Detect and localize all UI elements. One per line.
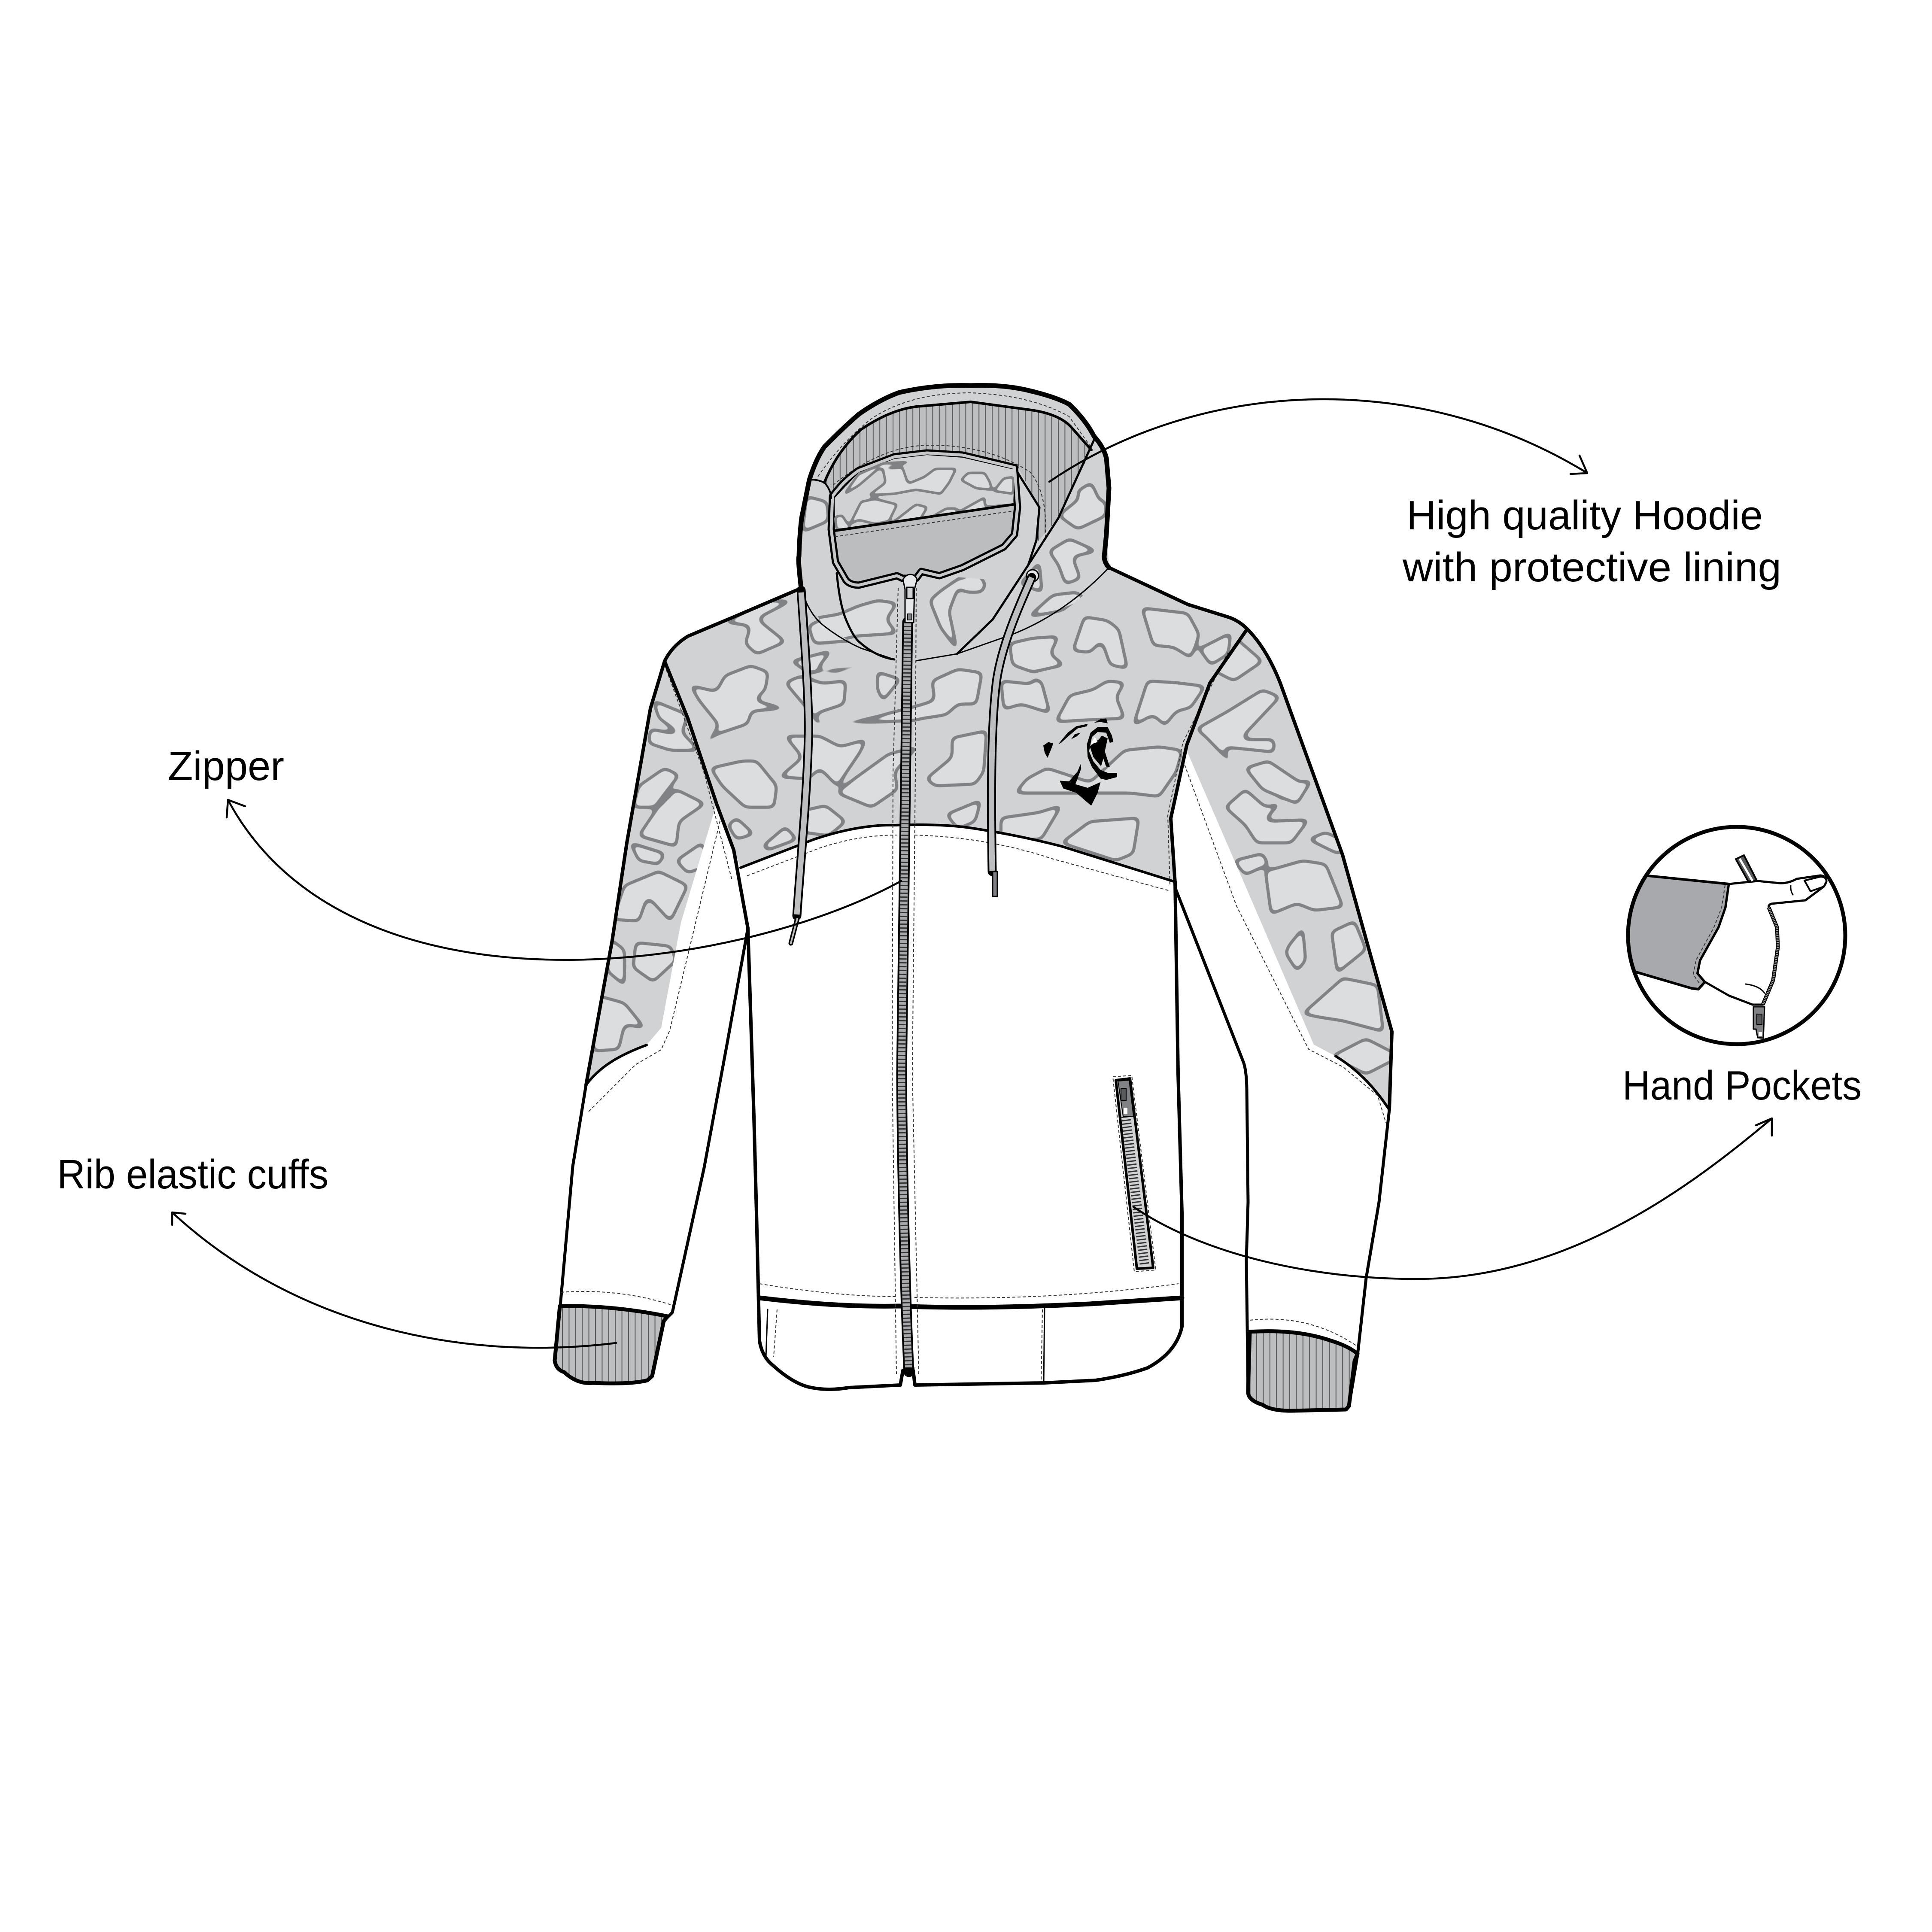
label: rib elastic cuffs: Rib elastic cuffs xyxy=(57,1151,328,1197)
inset ring xyxy=(1628,827,1845,1044)
ribbed hood lining xyxy=(824,402,1091,543)
inset zipper tape xyxy=(1736,855,1757,881)
shoulder and armhole outlines xyxy=(665,588,801,928)
label: hand pockets: Hand Pockets xyxy=(1622,1063,1862,1109)
arrow: cuffs callout xyxy=(172,1212,616,1348)
bear logo xyxy=(1043,718,1117,806)
arrow: hand pockets callout xyxy=(1133,1118,1772,1279)
inset hand xyxy=(1698,875,1826,1005)
thumbnail xyxy=(1804,877,1826,891)
main zipper xyxy=(892,574,919,1374)
hood opening interior xyxy=(831,453,1018,585)
hood front panel xyxy=(939,468,1039,581)
left drawstring xyxy=(791,590,808,943)
yoke with camouflage xyxy=(663,546,1249,928)
label: hoodie: with protective lining xyxy=(1402,544,1781,590)
inset: hand in pocket xyxy=(1623,827,1845,1044)
left rib cuff xyxy=(555,1306,668,1383)
hood xyxy=(799,386,1109,661)
hood seams xyxy=(957,440,1094,654)
label: hoodie: High quality Hoodie xyxy=(1406,492,1763,538)
label: zipper: Zipper xyxy=(168,743,284,789)
arrow: zipper callout xyxy=(227,800,901,960)
left sleeve xyxy=(559,660,747,1320)
inset zipper pull xyxy=(1753,1007,1765,1038)
body xyxy=(741,868,1182,1389)
hood outline xyxy=(799,386,1109,588)
zipper slider xyxy=(903,574,917,623)
pocket zipper slider xyxy=(1118,1080,1133,1116)
hem seam xyxy=(759,1298,1182,1307)
arrow: hoodie callout xyxy=(1049,399,1587,482)
right rib cuff xyxy=(1248,1331,1358,1411)
label: hoodie xyxy=(1402,492,1781,590)
right drawstring xyxy=(991,570,1039,896)
jacket illustration xyxy=(555,386,1400,1411)
right sleeve xyxy=(1171,629,1400,1411)
inset sleeve xyxy=(1623,873,1729,989)
pocket zipper xyxy=(1113,1075,1156,1272)
